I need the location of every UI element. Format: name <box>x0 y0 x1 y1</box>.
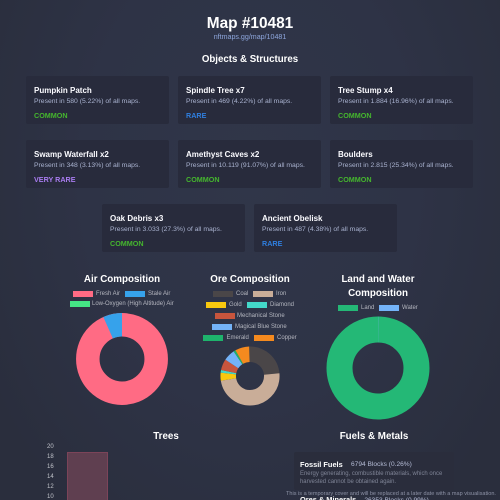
card: pumpkin patch <box>26 76 169 124</box>
card: tree stump <box>330 76 473 124</box>
card: fossil fuels: Fossil Fuels <box>300 460 343 469</box>
legend: air: Low-Oxygen (High Altitude) Air <box>92 301 174 307</box>
card: boulders: Boulders <box>338 150 373 159</box>
card: amethyst caves: COMMON <box>186 175 220 184</box>
card: spindle tree: RARE <box>186 111 206 120</box>
card: fossil fuels: 6794 Blocks (0.26%) <box>351 461 412 468</box>
card: pumpkin patch: Present in 580 (5.22%) of all maps. <box>34 98 140 104</box>
heading: objects and structures: Objects & Structures <box>202 54 298 65</box>
card: pumpkin patch: Pumpkin Patch <box>34 86 92 95</box>
legend: ore: Copper <box>277 335 297 341</box>
card: swamp waterfall: Swamp Waterfall x2 <box>34 150 109 159</box>
card: oak debris: COMMON <box>110 239 144 248</box>
card: ancient obelisk <box>254 204 397 252</box>
bar chart: trees <box>47 444 108 500</box>
legend: ore: Coal <box>236 291 248 297</box>
bar chart: trees: 20 <box>47 444 54 450</box>
card: amethyst caves: Amethyst Caves x2 <box>186 150 259 159</box>
card: pumpkin patch: COMMON <box>34 111 68 120</box>
card: spindle tree: Present in 469 (4.22%) of all maps. <box>186 98 292 104</box>
heading: trees: Trees <box>153 430 179 442</box>
card: boulders: COMMON <box>338 175 372 184</box>
card: amethyst caves <box>178 140 321 188</box>
legend: land and water: Water <box>402 305 418 311</box>
legend: ore: Mechanical Stone <box>237 313 285 319</box>
heading: fuels and metals: Fuels & Metals <box>340 430 408 442</box>
legend: ore <box>203 290 297 341</box>
title: Map #10481 <box>207 15 293 32</box>
card: swamp waterfall: Present in 348 (3.13%) of all maps. <box>34 162 140 168</box>
card: spindle tree: Spindle Tree x7 <box>186 86 245 95</box>
legend: ore: Iron <box>276 291 286 297</box>
heading: land and water composition: Composition <box>348 288 408 299</box>
donut: air composition <box>76 313 168 405</box>
bar chart: trees: 10 <box>47 494 54 500</box>
card: fossil fuels: Energy generating, combustible materials, which once <box>300 470 442 476</box>
card: fossil fuels <box>294 452 454 490</box>
card: oak debris: Present in 3.033 (27.3%) of all maps. <box>110 226 222 232</box>
legend: ore: Diamond <box>270 302 294 308</box>
card: swamp waterfall: VERY RARE <box>34 175 76 184</box>
legend: ore: Gold <box>229 302 242 308</box>
card: tree stump: Present in 1.884 (16.96%) of all maps. <box>338 98 454 104</box>
heading: land and water composition <box>341 274 415 299</box>
heading: land and water composition: Land and Water <box>341 274 415 285</box>
card: amethyst caves: Present in 10.119 (91.07%) of all maps. <box>186 162 305 168</box>
legend: ore: Emerald <box>226 335 249 341</box>
legend: air: Fresh Air <box>96 291 120 297</box>
card: tree stump: Tree Stump x4 <box>338 86 393 95</box>
heading: ore composition: Ore Composition <box>210 274 290 285</box>
card: ancient obelisk: Present in 487 (4.38%) of all maps. <box>262 226 368 232</box>
bar chart: trees: 16 <box>47 464 54 470</box>
legend: ore: Magical Blue Stone <box>235 324 287 330</box>
bar chart: trees: 12 <box>47 484 54 490</box>
card: ancient obelisk: Ancient Obelisk <box>262 214 322 223</box>
legend: land and water <box>338 304 418 311</box>
legend: air <box>70 290 174 307</box>
cover notice: This is a temporary cover and will be replaced at a later date with a map visualisation. <box>286 491 496 497</box>
card: fossil fuels: harvested cannot be obtained again. <box>300 478 396 484</box>
legend: air: Stale Air <box>148 291 170 297</box>
bar chart: trees: 18 <box>47 454 54 460</box>
card: boulders: Present in 2.815 (25.34%) of all maps. <box>338 162 454 168</box>
map link: nftmaps.gg/map/10481 <box>214 33 286 41</box>
bar chart: trees: 14 <box>47 474 54 480</box>
card: spindle tree <box>178 76 321 124</box>
card: swamp waterfall <box>26 140 169 188</box>
donut: ore composition <box>220 346 280 406</box>
legend: land and water: Land <box>361 305 374 311</box>
card: boulders <box>330 140 473 188</box>
card: oak debris <box>102 204 245 252</box>
card: ancient obelisk: RARE <box>262 239 282 248</box>
heading: air composition: Air Composition <box>84 274 160 285</box>
card: oak debris: Oak Debris x3 <box>110 214 163 223</box>
card: tree stump: COMMON <box>338 111 372 120</box>
donut: land and water <box>326 316 430 420</box>
